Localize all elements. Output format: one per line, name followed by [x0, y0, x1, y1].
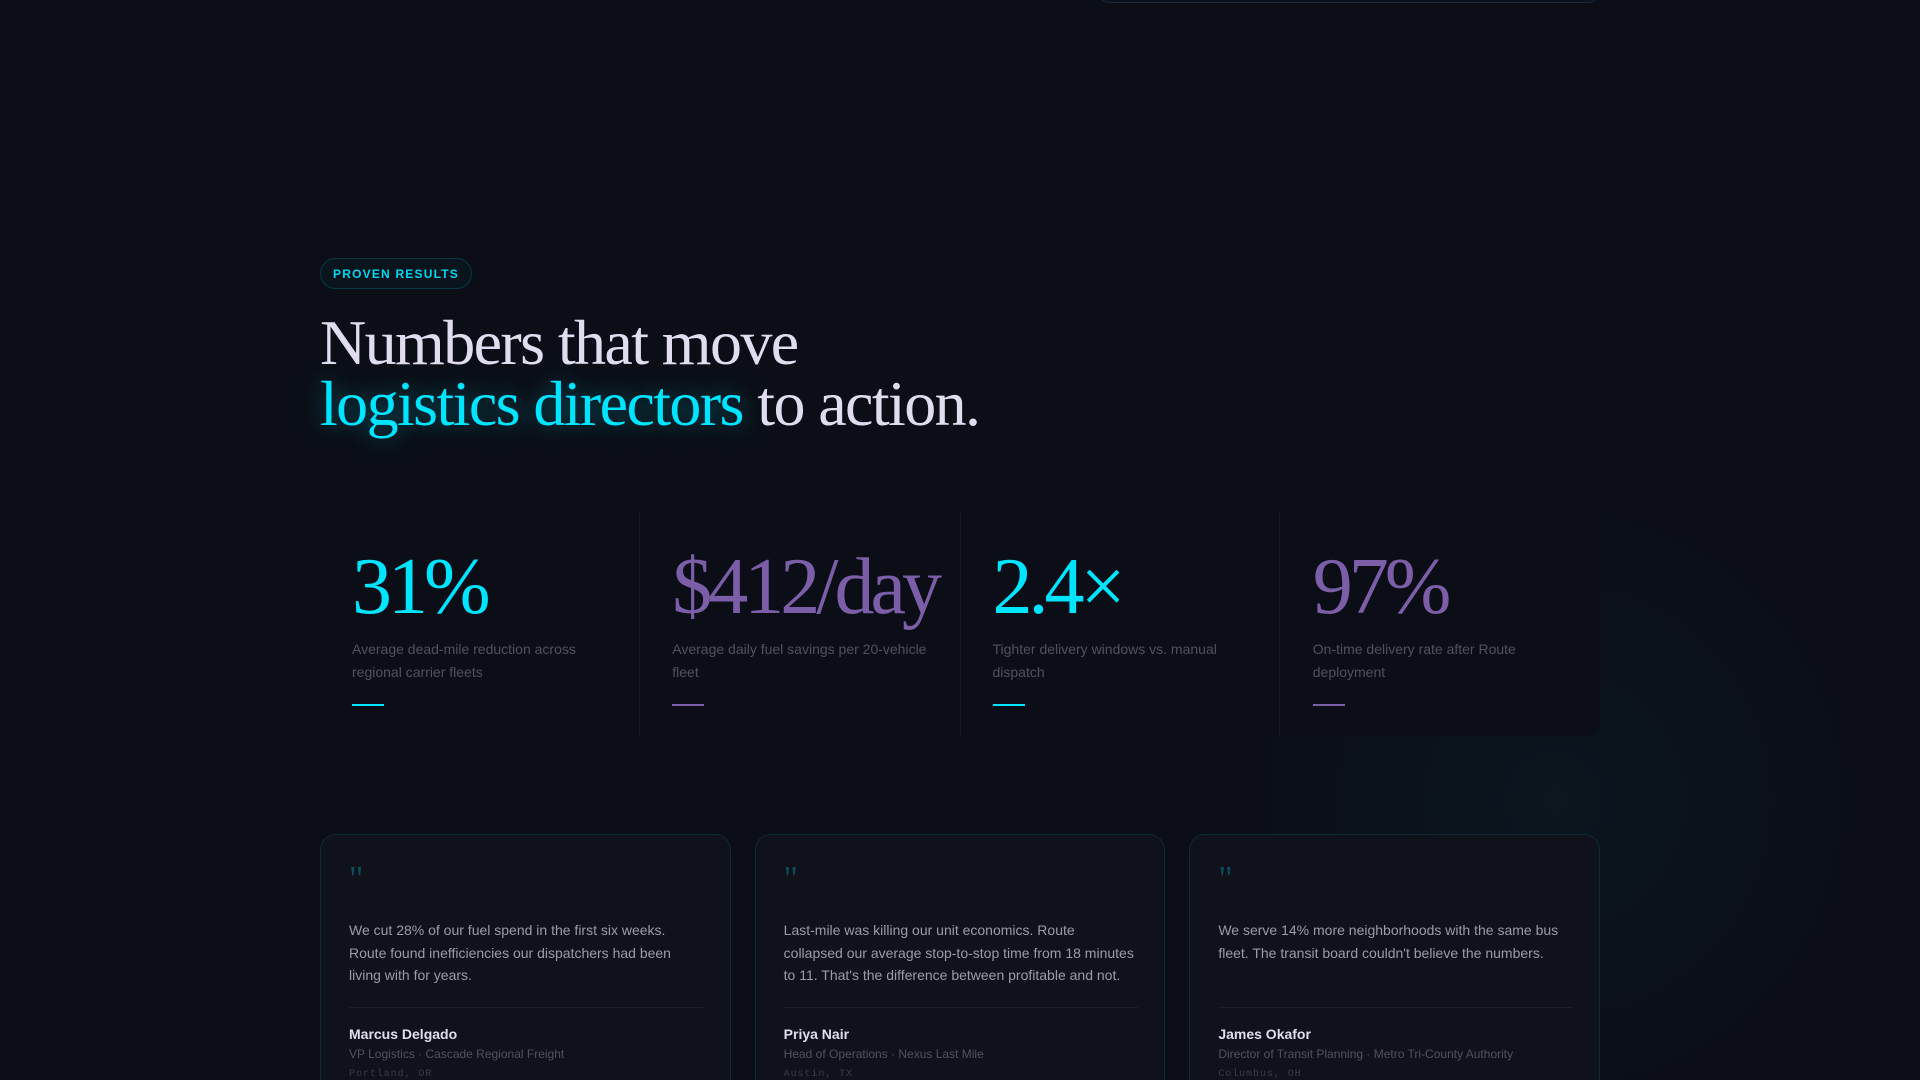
testimonial card: James Okafor	[1189, 834, 1600, 1080]
stat: on-time rate: On-time delivery rate after Route deployment	[1313, 641, 1516, 680]
stat: fuel savings: Average daily fuel savings per 20-vehicle fleet	[672, 641, 926, 680]
testimonial card: Marcus Delgado: Portland, OR	[349, 1069, 432, 1080]
title: Numbers that move	[320, 307, 798, 378]
stat: fuel savings: $412/day	[672, 543, 938, 631]
testimonial card: Priya Nair: Austin, TX	[784, 1069, 853, 1080]
testimonial card: James Okafor: Columbus, OH	[1218, 1069, 1302, 1080]
stat: dead-mile reduction	[352, 543, 576, 706]
stat: delivery windows: Tighter delivery windows vs. manual dispatch	[992, 641, 1217, 680]
testimonial card: James Okafor: "	[1218, 859, 1233, 898]
testimonial card: Marcus Delgado: "	[349, 859, 363, 898]
badge: proven results	[320, 258, 472, 289]
title	[316, 307, 979, 445]
stat: on-time rate: 97%	[1313, 543, 1447, 631]
testimonial card: James Okafor: Director of Transit Planning · Metro Tri-County Authority	[1218, 1047, 1513, 1061]
testimonial card: James Okafor: James Okafor	[1218, 1026, 1311, 1042]
testimonial card: James Okafor: We serve 14% more neighborhoods with the same bus fleet. The transit board couldn't believe the numbers.	[1218, 922, 1558, 961]
testimonial card: Priya Nair: Head of Operations · Nexus Last Mile	[784, 1047, 984, 1061]
title: logistics directors to action.	[320, 368, 979, 439]
testimonial card: Priya Nair: Priya Nair	[784, 1026, 849, 1042]
testimonial card: Priya Nair: "	[784, 859, 798, 898]
stat: on-time rate	[1313, 543, 1516, 706]
stat: fuel savings	[672, 543, 942, 706]
stat: dead-mile reduction: Average dead-mile reduction across regional carrier fleets	[352, 641, 576, 680]
testimonial card: Priya Nair: Last-mile was killing our unit economics. Route collapsed our average stop-to-stop time from 18 minutes to 11. That's the difference between profitable and not.	[784, 922, 1134, 983]
testimonial card: Priya Nair	[755, 834, 1165, 1080]
background glow	[1245, 490, 1865, 1080]
testimonial card: Marcus Delgado: We cut 28% of our fuel spend in the first six weeks. Route found inefficiencies our dispatchers had been living with for years.	[349, 922, 671, 983]
panel: stats	[320, 512, 1600, 736]
stat: delivery windows: 2.4×	[992, 543, 1122, 631]
testimonial card: Marcus Delgado: VP Logistics · Cascade Regional Freight	[349, 1047, 564, 1061]
testimonial card: Marcus Delgado: Marcus Delgado	[349, 1026, 457, 1042]
stat: delivery windows	[992, 543, 1217, 706]
testimonial card: Marcus Delgado	[320, 834, 731, 1080]
clipped top panel edge	[1098, 0, 1600, 3]
badge: proven results: PROVEN RESULTS	[333, 267, 459, 281]
stat: dead-mile reduction: 31%	[352, 543, 487, 631]
